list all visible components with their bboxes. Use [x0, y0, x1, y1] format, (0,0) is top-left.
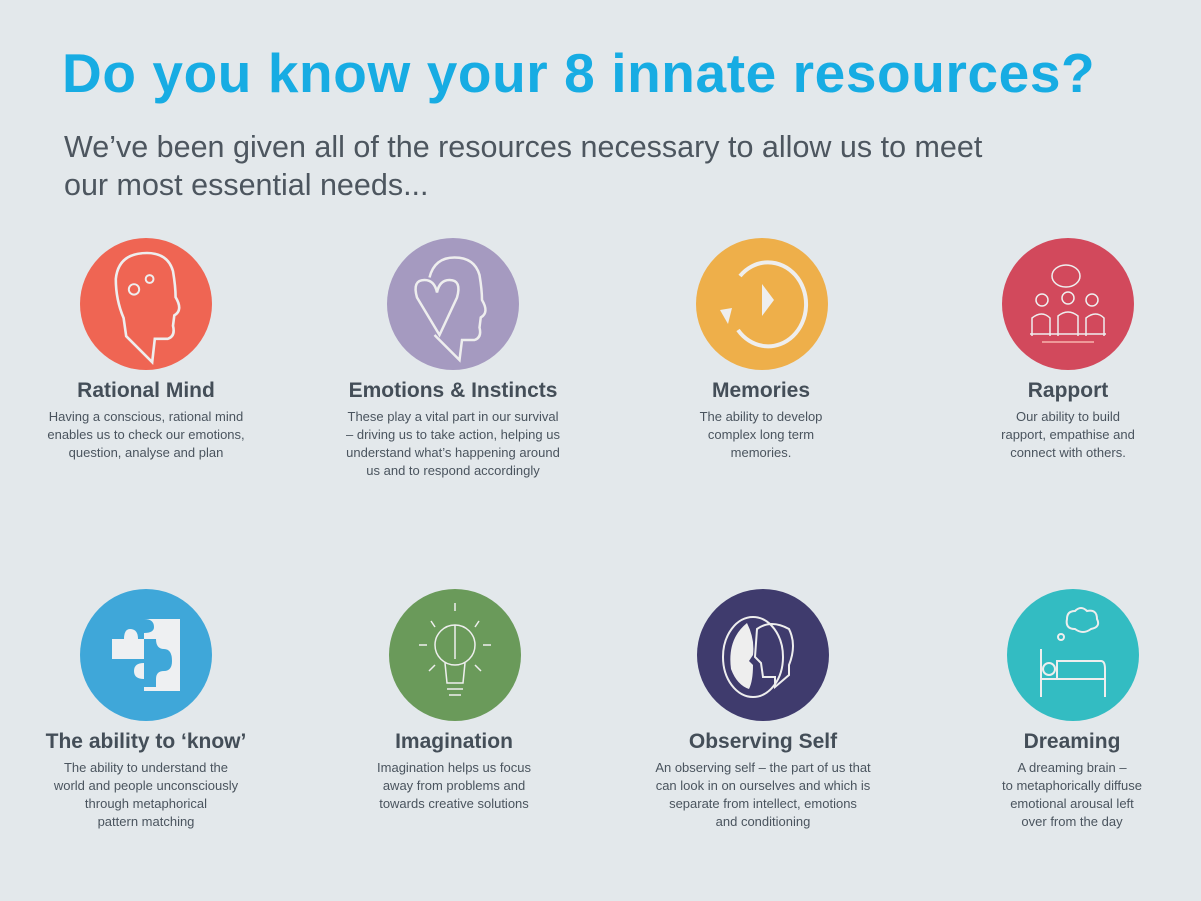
panel: memories: The ability to develop	[700, 409, 822, 424]
panel: memories: Memories	[712, 379, 810, 402]
panel: observing self: An observing self – the part of us that	[655, 760, 871, 775]
icon: imagination bulb	[389, 589, 521, 721]
panel: emotions	[346, 379, 560, 478]
panel: imagination: away from problems and	[383, 778, 525, 793]
panel: observing self: separate from intellect, emotions	[669, 796, 857, 811]
panel: dreaming: A dreaming brain –	[1017, 760, 1127, 775]
icon: emotions	[387, 238, 519, 370]
panel: dreaming: to metaphorically diffuse	[1002, 778, 1142, 793]
panel: observing self	[655, 730, 871, 829]
panel: know: The ability to ‘know’	[46, 730, 246, 753]
icon: dreaming	[1007, 589, 1139, 721]
icon: memories	[696, 238, 828, 370]
icon: rational mind	[80, 238, 212, 370]
panel: rational mind	[47, 379, 245, 460]
panel: imagination: towards creative solutions	[379, 796, 529, 811]
subtitle: our most essential needs...	[64, 168, 428, 202]
panel: know: world and people unconsciously	[54, 778, 238, 793]
panel: imagination: Imagination	[395, 730, 513, 753]
panel: rational mind: Having a conscious, rational mind	[49, 409, 243, 424]
panel: imagination	[377, 730, 531, 811]
panel: rapport: rapport, empathise and	[1001, 427, 1135, 442]
panel: dreaming: Dreaming	[1024, 730, 1120, 753]
panel: emotions: understand what’s happening around	[346, 445, 560, 460]
panel: memories	[700, 379, 822, 460]
panel: dreaming: over from the day	[1021, 814, 1123, 829]
panel: observing self: can look in on ourselves and which is	[656, 778, 870, 793]
subtitle	[64, 130, 982, 202]
panel: know: The ability to understand the	[64, 760, 228, 775]
panel: memories: memories.	[731, 445, 791, 460]
panel: dreaming: emotional arousal left	[1010, 796, 1134, 811]
panel: rational mind: enables us to check our emotions,	[47, 427, 245, 442]
panel: observing self: and conditioning	[716, 814, 810, 829]
panel: rational mind: question, analyse and plan	[69, 445, 223, 460]
panel: emotions: – driving us to take action, helping us	[346, 427, 560, 442]
panel: observing self: Observing Self	[689, 730, 837, 753]
panel: rapport: connect with others.	[1010, 445, 1126, 460]
panel: memories: complex long term	[708, 427, 814, 442]
panel: emotions: Emotions & Instincts	[349, 379, 557, 402]
title: Do you know your 8 innate resources?	[62, 42, 1095, 104]
icon: rapport	[1002, 238, 1134, 370]
panel: imagination: Imagination helps us focus	[377, 760, 531, 775]
panel: rapport: Our ability to build	[1016, 409, 1120, 424]
panel: rapport: Rapport	[1028, 379, 1108, 402]
icon: know puzzle	[80, 589, 212, 721]
panel: know	[46, 730, 246, 829]
panel: know: through metaphorical	[85, 796, 207, 811]
panel: know: pattern matching	[98, 814, 194, 829]
panel: emotions: These play a vital part in our survival	[348, 409, 558, 424]
icon: observing self	[697, 589, 829, 721]
subtitle: We’ve been given all of the resources necessary to allow us to meet	[64, 130, 982, 164]
panel: rapport	[1001, 379, 1135, 460]
panel: rational mind: Rational Mind	[77, 379, 215, 402]
panel: dreaming	[1002, 730, 1142, 829]
panel: emotions: us and to respond accordingly	[366, 463, 540, 478]
